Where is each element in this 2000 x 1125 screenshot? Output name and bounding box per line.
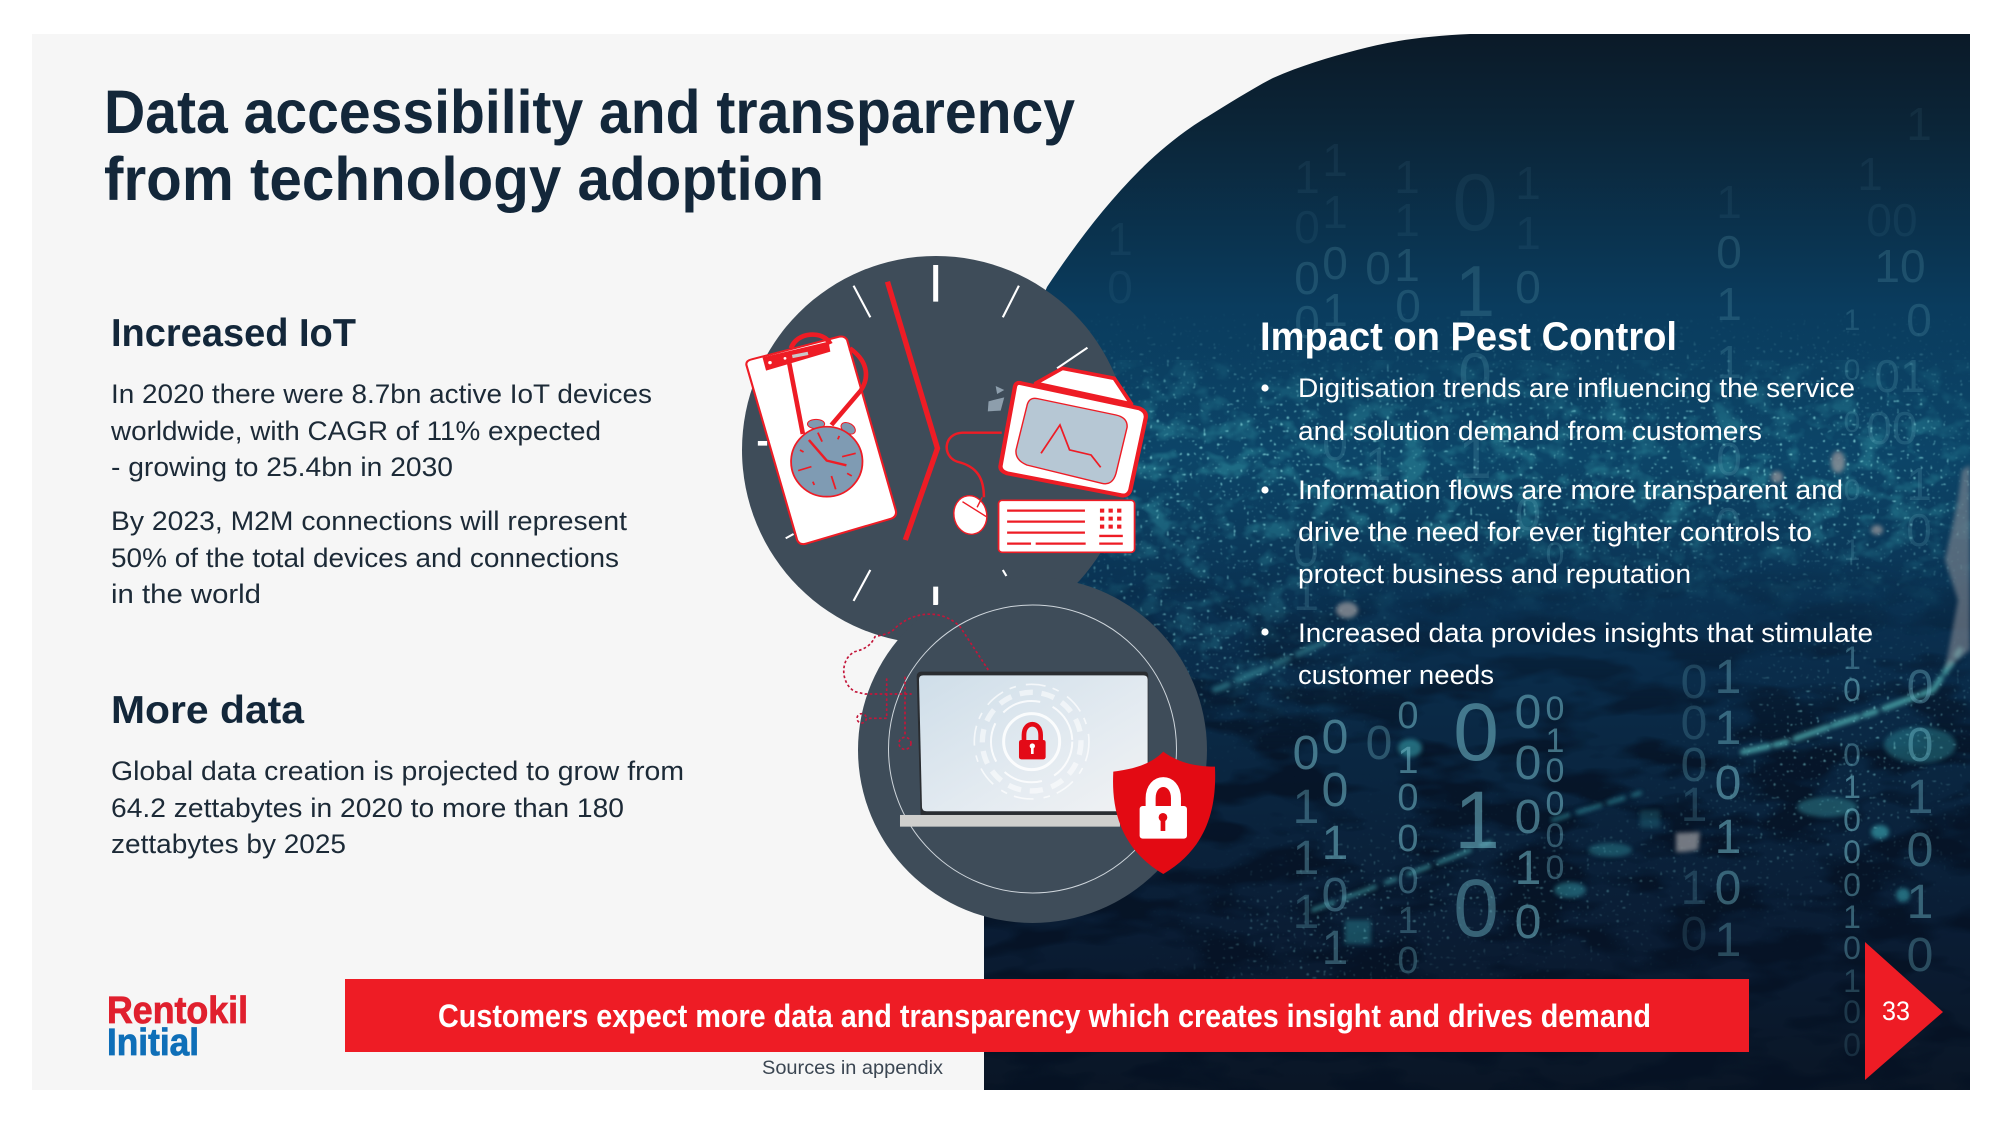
binary digits: lower: 0 xyxy=(1515,791,1541,844)
binary digits: lower: 1 xyxy=(1681,779,1707,832)
text block: data creation xyxy=(111,756,684,859)
binary digits: lower: 1 xyxy=(1515,842,1541,895)
chevron divider xyxy=(887,282,937,540)
binary digits: lower: 0 xyxy=(1366,717,1392,770)
logo: Rentokil Initial: Rentokil xyxy=(107,990,248,1032)
title xyxy=(104,78,1075,213)
binary digits: lower: 0 xyxy=(1907,661,1933,714)
binary digits: middle xyxy=(1293,226,1932,620)
binary digits: lower: 1 xyxy=(1907,771,1933,824)
logo: Rentokil Initial: Initial xyxy=(107,1022,199,1064)
heading: More data: More data xyxy=(111,689,304,732)
binary digits: lower: 0 xyxy=(1397,860,1419,902)
binary digits: middle: 0 xyxy=(1716,226,1742,278)
bullet list: impact: protect business and reputation xyxy=(1298,559,1691,589)
binary digits: lower: 0 xyxy=(1715,757,1741,810)
binary digits: lower: 0 xyxy=(1843,930,1861,966)
binary digits: middle: 1 xyxy=(1458,424,1492,491)
binary digits: lower: 1 xyxy=(1293,781,1319,834)
map patches xyxy=(1336,451,1970,852)
binary digits: lower: 0 xyxy=(1681,739,1707,792)
binary digits: middle: 0 xyxy=(1515,261,1541,313)
binary digits: lower: 0 xyxy=(1843,834,1861,870)
binary digits: lower: 0 xyxy=(1546,690,1564,728)
binary digits: upper faint: 1 xyxy=(1716,176,1742,228)
binary digits: lower: 0 xyxy=(1322,711,1348,764)
binary digits: upper faint: 1 xyxy=(1394,151,1420,203)
binary digits: middle: 0 xyxy=(1322,418,1348,470)
binary digits: upper faint xyxy=(1107,98,1932,313)
binary digits: middle: 0 xyxy=(1844,474,1860,507)
binary digits: lower: 0 xyxy=(1515,686,1541,739)
callout banner xyxy=(345,979,1749,1052)
binary digits: lower: 0 xyxy=(1843,737,1861,773)
binary digits: middle: 1 xyxy=(1365,438,1391,490)
binary digits: middle: 0 xyxy=(1715,498,1741,550)
icon: phone with stopwatch xyxy=(746,335,896,544)
binary digits: middle: 0 xyxy=(1906,294,1932,346)
binary digits: lower: 1 xyxy=(1715,702,1741,755)
title: Data accessibility and transparency xyxy=(104,78,1075,146)
binary digits: lower: 0 xyxy=(1546,785,1564,823)
binary digits: middle: 1 xyxy=(1322,284,1348,336)
binary digits: middle: 10 xyxy=(1874,240,1926,292)
binary digits: lower: 1 xyxy=(1715,914,1741,967)
binary digits: lower: 0 xyxy=(1453,687,1499,778)
binary digits: middle: 0 xyxy=(1365,242,1391,294)
binary digits: lower: 0 xyxy=(1293,727,1319,780)
clock ticks xyxy=(758,265,1087,605)
text block: IoT statistics: worldwide, with CAGR of 11% expected xyxy=(110,416,601,446)
binary digits: upper faint: 1 xyxy=(1394,194,1420,246)
binary digits: middle: 1 xyxy=(1394,239,1420,291)
icon: keyboard xyxy=(999,500,1135,552)
binary digits: upper faint: 0 xyxy=(1107,261,1133,313)
binary digits: middle: 1 xyxy=(1455,252,1495,332)
binary digits: middle: 0 xyxy=(1294,252,1320,304)
bullet list: impact: customer needs xyxy=(1298,660,1494,690)
logo: Rentokil Initial xyxy=(107,990,248,1064)
binary digits: middle: 1 xyxy=(1716,336,1742,388)
binary digits: middle: 1 xyxy=(1293,568,1319,620)
icon: mouse and cable xyxy=(947,433,1002,536)
binary digits: upper faint: 1 xyxy=(1515,157,1541,209)
binary digits: lower: 1 xyxy=(1715,651,1741,704)
binary digits: middle: 0 xyxy=(1844,354,1860,387)
binary digits: lower: 0 xyxy=(1453,863,1499,954)
text block: IoT statistics: - growing to 25.4bn in 2030 xyxy=(111,452,453,482)
binary digits: lower: 1 xyxy=(1322,922,1348,975)
title: from technology adoption xyxy=(104,145,824,213)
icon: map fragments xyxy=(988,386,1004,411)
binary digits: middle: 0 xyxy=(1293,524,1319,576)
source note: Sources in appendix xyxy=(762,1057,943,1079)
binary digits: lower: 0 xyxy=(1907,719,1933,772)
binary digits: lower: 0 xyxy=(1843,1027,1861,1063)
binary digits: lower: 1 xyxy=(1715,811,1741,864)
icon: computer monitor xyxy=(1000,368,1146,496)
binary digits: lower: 1 xyxy=(1546,722,1564,760)
binary digits: middle: 0 xyxy=(1395,280,1421,332)
binary digits: upper faint: 1 xyxy=(1322,186,1348,238)
binary digits: lower: 0 xyxy=(1397,818,1419,860)
binary digits: lower: 0 xyxy=(1681,908,1707,961)
icon: laptop xyxy=(900,672,1148,827)
text block: data creation: zettabytes by 2025 xyxy=(111,829,346,859)
binary digits: lower: 0 xyxy=(1715,862,1741,915)
binary digits: lower: 1 xyxy=(1843,640,1861,676)
binary digits: middle: 1 xyxy=(1906,458,1932,510)
binary digits: upper faint: 1 xyxy=(1294,151,1320,203)
binary digits: middle: 1 xyxy=(1844,534,1860,567)
bullet list: impact xyxy=(1261,373,1873,690)
binary digits: lower: 0 xyxy=(1397,695,1419,737)
binary digits: lower: 0 xyxy=(1843,994,1861,1030)
binary digits: upper faint: 1 xyxy=(1906,98,1932,150)
illustration: laptop security circle xyxy=(844,577,1215,923)
binary digits: lower: 1 xyxy=(1843,899,1861,935)
binary digits: middle: 1 xyxy=(1716,278,1742,330)
dotted network lines xyxy=(844,614,988,749)
binary digits: lower: 0 xyxy=(1681,656,1707,709)
binary digits: middle: 0 xyxy=(1546,536,1564,574)
binary digits: middle: 1 xyxy=(1844,304,1860,337)
binary digits: upper faint: 1 xyxy=(1107,213,1133,265)
binary digits: lower: 1 xyxy=(1843,769,1861,805)
heading: Increased IoT: Increased IoT xyxy=(111,312,356,355)
binary digits: lower: 0 xyxy=(1322,764,1348,817)
bullet list: impact: Digitisation trends are influencing the service xyxy=(1298,373,1855,403)
text block: data creation: Global data creation is projected to grow from xyxy=(111,756,684,786)
bullet list: impact: and solution demand from customers xyxy=(1298,416,1762,446)
text block: IoT statistics: in the world xyxy=(111,579,261,609)
binary digits: lower: 1 xyxy=(1293,832,1319,885)
binary digits: upper faint: 1 xyxy=(1515,207,1541,259)
binary digits: middle: 0 xyxy=(1716,433,1742,485)
binary digits: upper faint: 0 xyxy=(1294,201,1320,253)
bullet list: impact: Information flows are more transparent and xyxy=(1298,475,1843,505)
binary digits: lower: 1 xyxy=(1907,876,1933,929)
binary digits: middle: 0 xyxy=(1906,504,1932,556)
binary digits: lower xyxy=(1293,640,1933,1063)
binary digits: lower: 0 xyxy=(1515,896,1541,949)
binary digits: lower: 0 xyxy=(1907,824,1933,877)
icon: red shield with padlock xyxy=(1113,752,1215,874)
page number arrow: 33 xyxy=(1882,996,1910,1026)
icon: small red padlock xyxy=(1019,724,1046,759)
binary digits: lower: 0 xyxy=(1907,929,1933,982)
text block: IoT statistics: 50% of the total devices and connections xyxy=(111,543,619,573)
binary digits: upper faint: 0 xyxy=(1452,158,1498,248)
binary digits: lower: 1 xyxy=(1681,862,1707,915)
binary digits: lower: 0 xyxy=(1546,849,1564,887)
bullet list: impact: drive the need for ever tighter controls to xyxy=(1298,517,1812,547)
binary digits: middle: 0 xyxy=(1322,237,1348,289)
binary digits: lower: 1 xyxy=(1454,775,1500,866)
binary digits: lower: 1 xyxy=(1322,817,1348,870)
binary digits: lower: 0 xyxy=(1843,867,1861,903)
city light strands xyxy=(1215,640,1960,910)
page number arrow xyxy=(1865,942,1943,1080)
binary digits: middle: 0 xyxy=(1515,488,1541,540)
heading: Impact on Pest Control: Impact on Pest Control xyxy=(1260,315,1677,359)
panel: dark data city image xyxy=(984,34,1970,1090)
binary digits: lower: 0 xyxy=(1546,752,1564,790)
binary digits: lower: 0 xyxy=(1843,672,1861,708)
binary digits: lower: 1 xyxy=(1397,900,1419,942)
binary digits: middle: 01 xyxy=(1874,350,1926,402)
binary digits: middle: 0 xyxy=(1844,406,1860,439)
illustration: clock face with phone and computer xyxy=(742,256,1146,644)
binary digits: lower: 1 xyxy=(1843,963,1861,999)
binary digits: upper faint: 1 xyxy=(1857,148,1883,200)
binary digits: lower: 0 xyxy=(1843,802,1861,838)
text block: IoT statistics: In 2020 there were 8.7bn active IoT devices xyxy=(111,379,652,409)
binary digits: lower: 1 xyxy=(1293,886,1319,939)
text block: data creation: 64.2 zettabytes in 2020 to more than 180 xyxy=(111,793,624,823)
callout banner: Customers expect more data and transparency which creates insight and drives demand xyxy=(438,998,1651,1034)
binary digits: lower: 0 xyxy=(1515,737,1541,790)
text block: IoT statistics: By 2023, M2M connections will represent xyxy=(111,506,628,536)
binary digits: lower: 0 xyxy=(1397,940,1419,982)
binary digits: lower: 0 xyxy=(1681,697,1707,750)
binary digits: upper faint: 00 xyxy=(1866,194,1918,246)
binary digits: middle: 0 xyxy=(1458,341,1492,408)
binary digits: upper faint: 1 xyxy=(1322,134,1348,186)
binary digits: middle: 0 xyxy=(1294,296,1320,348)
binary digits: lower: 0 xyxy=(1546,817,1564,855)
binary digits: lower: 0 xyxy=(1397,777,1419,819)
binary digits: lower: 0 xyxy=(1322,869,1348,922)
binary digits: lower: 1 xyxy=(1397,740,1419,782)
binary digits: middle: 00 xyxy=(1866,402,1918,454)
bullet list: impact: Increased data provides insights that stimulate xyxy=(1298,618,1873,648)
text block: IoT statistics xyxy=(110,379,652,609)
